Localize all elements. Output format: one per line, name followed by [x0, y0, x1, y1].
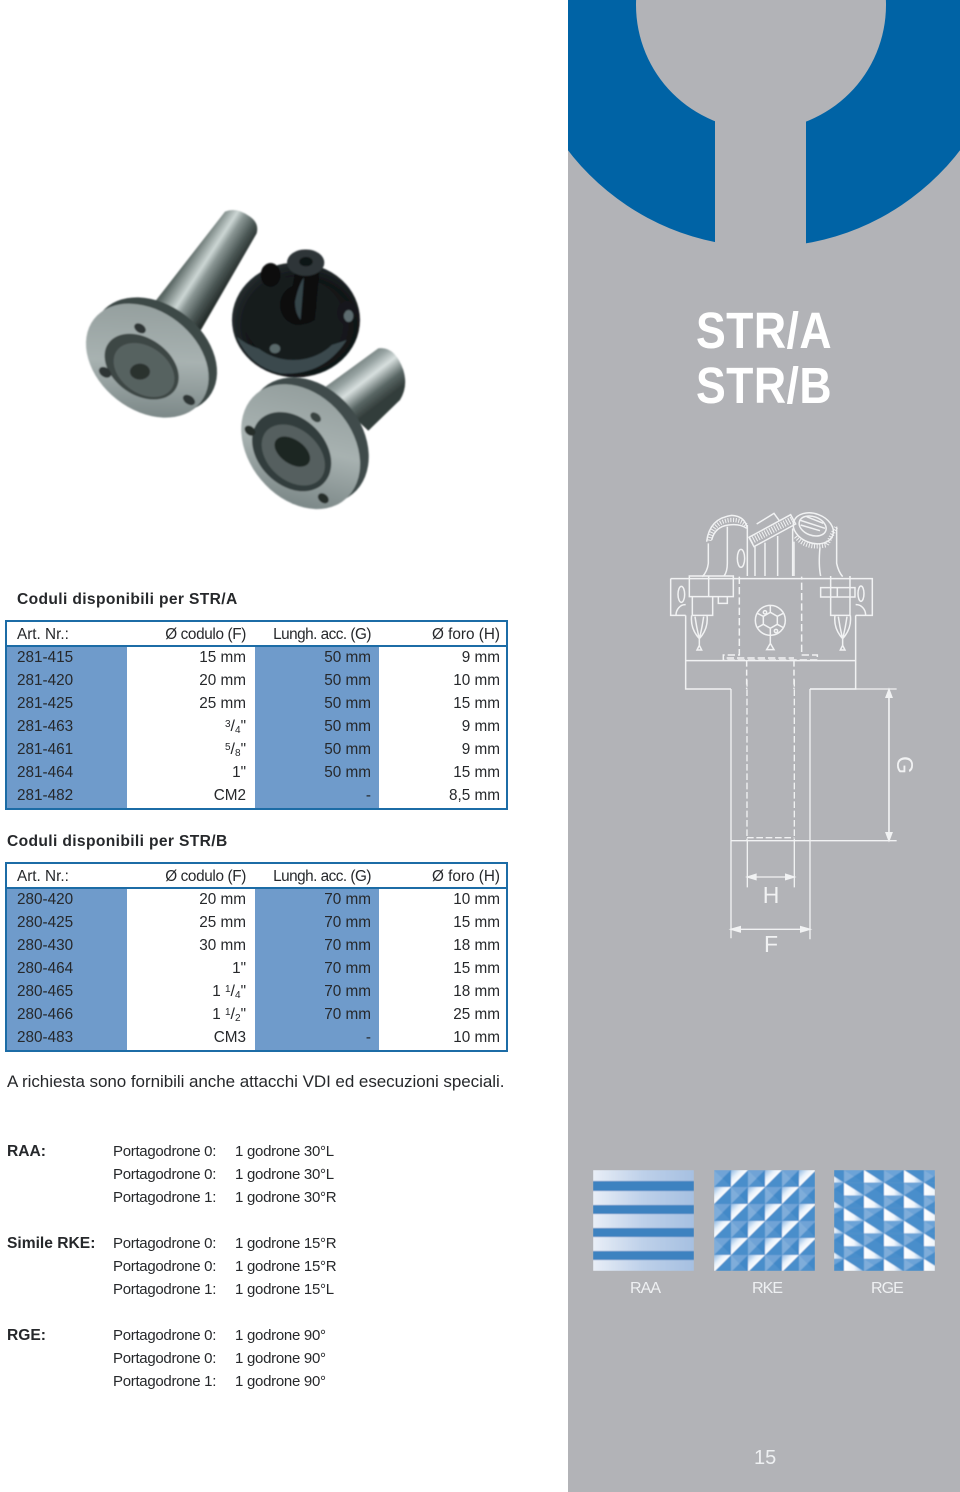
table: STR/A codes: 50 mm [324, 695, 371, 712]
drawing: shank and dimensions [731, 680, 897, 939]
table: STR/B codes: CM3 [214, 1029, 246, 1046]
tool: right head [789, 507, 838, 549]
list: Simile RKE [7, 1235, 336, 1298]
table: STR/A codes: 15 mm [453, 764, 500, 781]
table: STR/B codes: Art. Nr.: [17, 868, 69, 885]
arrow: F [733, 927, 808, 931]
list: RGE: Portagodrone 1: [113, 1373, 216, 1390]
list: RGE: 1 godrone 90° [235, 1327, 326, 1344]
list: Simile RKE: Simile RKE: [7, 1235, 95, 1252]
table: STR/B codes: 70 mm [324, 1006, 371, 1023]
table: STR/B codes: 70 mm [324, 937, 371, 954]
table: STR/A codes: Art. Nr.: [17, 626, 69, 643]
table: STR/B codes: 70 mm [324, 914, 371, 931]
table: STR/A codes: 20 mm [199, 672, 246, 689]
table: STR/A codes: 15 mm [453, 695, 500, 712]
list: RAA: 1 godrone 30°R [235, 1189, 336, 1206]
table: STR/A codes: 10 mm [453, 672, 500, 689]
drawing: tool head [671, 507, 872, 689]
table: STR/B codes: 280-430 [17, 937, 73, 954]
table: STR/A codes: 1" [232, 764, 246, 781]
table: STR/B codes: 280-465 [17, 983, 73, 1000]
heading: STR/B table: Coduli disponibili per STR/B [7, 833, 228, 850]
list: RGE: Portagodrone 0: [113, 1327, 216, 1344]
swatch: RKE [714, 1170, 815, 1271]
list: Simile RKE: Portagodrone 1: [113, 1281, 216, 1298]
table: STR/A codes: - [366, 787, 371, 804]
table: STR/B codes: 15 mm [453, 914, 500, 931]
table: STR/A codes: 50 mm [324, 718, 371, 735]
table: STR/A codes: 50 mm [324, 649, 371, 666]
table: STR/B codes: Ø codulo (F) [165, 868, 246, 885]
swatch: RGE [834, 1170, 935, 1271]
list: RAA: 1 godrone 30°L [235, 1166, 334, 1183]
table: STR/B codes: 18 mm [453, 983, 500, 1000]
table: STR/A codes: 281-482 [17, 787, 73, 804]
list: RAA: Portagodrone 1: [113, 1189, 216, 1206]
photo: three tool shanks [85, 209, 406, 510]
table: STR/A codes: Ø codulo (F) [165, 626, 246, 643]
table: STR/B codes: - [366, 1029, 371, 1046]
table: STR/A codes: 9 mm [462, 649, 500, 666]
list: Simile RKE: Portagodrone 0: [113, 1258, 216, 1275]
label: RKE: RKE [752, 1280, 782, 1297]
table: STR/A codes: 3/4" [225, 718, 246, 736]
table: STR/B codes: 1" [232, 960, 246, 977]
list: RGE [7, 1327, 326, 1390]
table: STR/B codes: 30 mm [199, 937, 246, 954]
table: STR/B codes: Lungh. acc. (G) [273, 868, 371, 885]
table: STR/B codes: 70 mm [324, 983, 371, 1000]
table: STR/B codes: 1 1/4" [212, 983, 246, 1001]
table: STR/B codes: 25 mm [453, 1006, 500, 1023]
list: Simile RKE: 1 godrone 15°R [235, 1235, 336, 1252]
table: STR/A codes: 281-463 [17, 718, 73, 735]
table: STR/A codes: CM2 [214, 787, 246, 804]
table: STR/A codes: 15 mm [199, 649, 246, 666]
list: RAA [7, 1143, 336, 1206]
table: STR/A codes: 50 mm [324, 672, 371, 689]
table: STR/B codes: 15 mm [453, 960, 500, 977]
label: RGE: RGE [871, 1280, 903, 1297]
table: STR/A codes [5, 620, 508, 810]
tool: middle gear [749, 515, 796, 547]
list: Simile RKE: Portagodrone 0: [113, 1235, 216, 1252]
table: STR/B codes: 10 mm [453, 1029, 500, 1046]
list: Simile RKE: 1 godrone 15°L [235, 1281, 334, 1298]
tall shank [64, 210, 257, 441]
table: STR/A codes: 25 mm [199, 695, 246, 712]
table: STR/B codes: 280-425 [17, 914, 73, 931]
table: STR/A codes: 281-464 [17, 764, 73, 781]
list: RAA: Portagodrone 0: [113, 1166, 216, 1183]
title: STR/A [696, 302, 832, 359]
list: RAA: 1 godrone 30°L [235, 1143, 334, 1160]
list: RAA: RAA: [7, 1143, 46, 1160]
table: STR/A codes: 281-425 [17, 695, 73, 712]
table: STR/B codes: 1 1/2" [212, 1006, 246, 1024]
label: F: F [764, 931, 778, 957]
list: RGE: RGE: [7, 1327, 46, 1344]
label: H: H [763, 882, 779, 908]
swatch: RAA [593, 1170, 694, 1271]
table: STR/A codes: 5/8" [225, 741, 246, 759]
table: STR/A codes: Ø foro (H) [432, 626, 500, 643]
title: STR/B [696, 356, 832, 414]
label: RAA: RAA [630, 1280, 660, 1297]
black flange part [232, 249, 360, 377]
list: RAA: Portagodrone 0: [113, 1143, 216, 1160]
arrow: G [886, 693, 891, 837]
table: STR/A codes: 281-415 [17, 649, 73, 666]
heading: STR/A table: Coduli disponibili per STR/A [17, 591, 238, 608]
page number: 15 [754, 1447, 776, 1469]
table: STR/A codes: 281-420 [17, 672, 73, 689]
short shank [217, 348, 405, 533]
table: STR/B codes: 25 mm [199, 914, 246, 931]
tool: left knurled [702, 525, 747, 577]
table: STR/B codes: 280-420 [17, 891, 73, 908]
panel: grey sidebar [568, 0, 960, 1492]
table: STR/B codes: 280-483 [17, 1029, 73, 1046]
table: STR/A codes: 9 mm [462, 718, 500, 735]
table: STR/A codes: Lungh. acc. (G) [273, 626, 371, 643]
table: STR/B codes: 18 mm [453, 937, 500, 954]
table: STR/B codes: Ø foro (H) [432, 868, 500, 885]
technical drawing: tool holder [670, 512, 918, 957]
table: STR/A codes: 281-461 [17, 741, 73, 758]
table: STR/A codes: 50 mm [324, 764, 371, 781]
list: RGE: Portagodrone 0: [113, 1350, 216, 1367]
note: special versions: A richiesta sono fornibili anche attacchi VDI ed esecuzioni speciali. [7, 1072, 504, 1091]
list: Simile RKE: 1 godrone 15°R [235, 1258, 336, 1275]
logo: blue circle with grey keyhole [568, 0, 960, 244]
table: STR/B codes [5, 862, 508, 1052]
table: STR/B codes: 70 mm [324, 960, 371, 977]
title [696, 302, 832, 414]
table: STR/A codes: 50 mm [324, 741, 371, 758]
table: STR/B codes: 280-466 [17, 1006, 73, 1023]
table: STR/B codes: 10 mm [453, 891, 500, 908]
arrow: H [750, 875, 792, 879]
table: STR/B codes: 70 mm [324, 891, 371, 908]
table: STR/A codes: 8,5 mm [449, 787, 500, 804]
label: G: G [892, 756, 918, 774]
table: STR/B codes: 280-464 [17, 960, 73, 977]
table: STR/A codes: 9 mm [462, 741, 500, 758]
table: STR/B codes: 20 mm [199, 891, 246, 908]
list: RGE: 1 godrone 90° [235, 1350, 326, 1367]
list: RGE: 1 godrone 90° [235, 1373, 326, 1390]
